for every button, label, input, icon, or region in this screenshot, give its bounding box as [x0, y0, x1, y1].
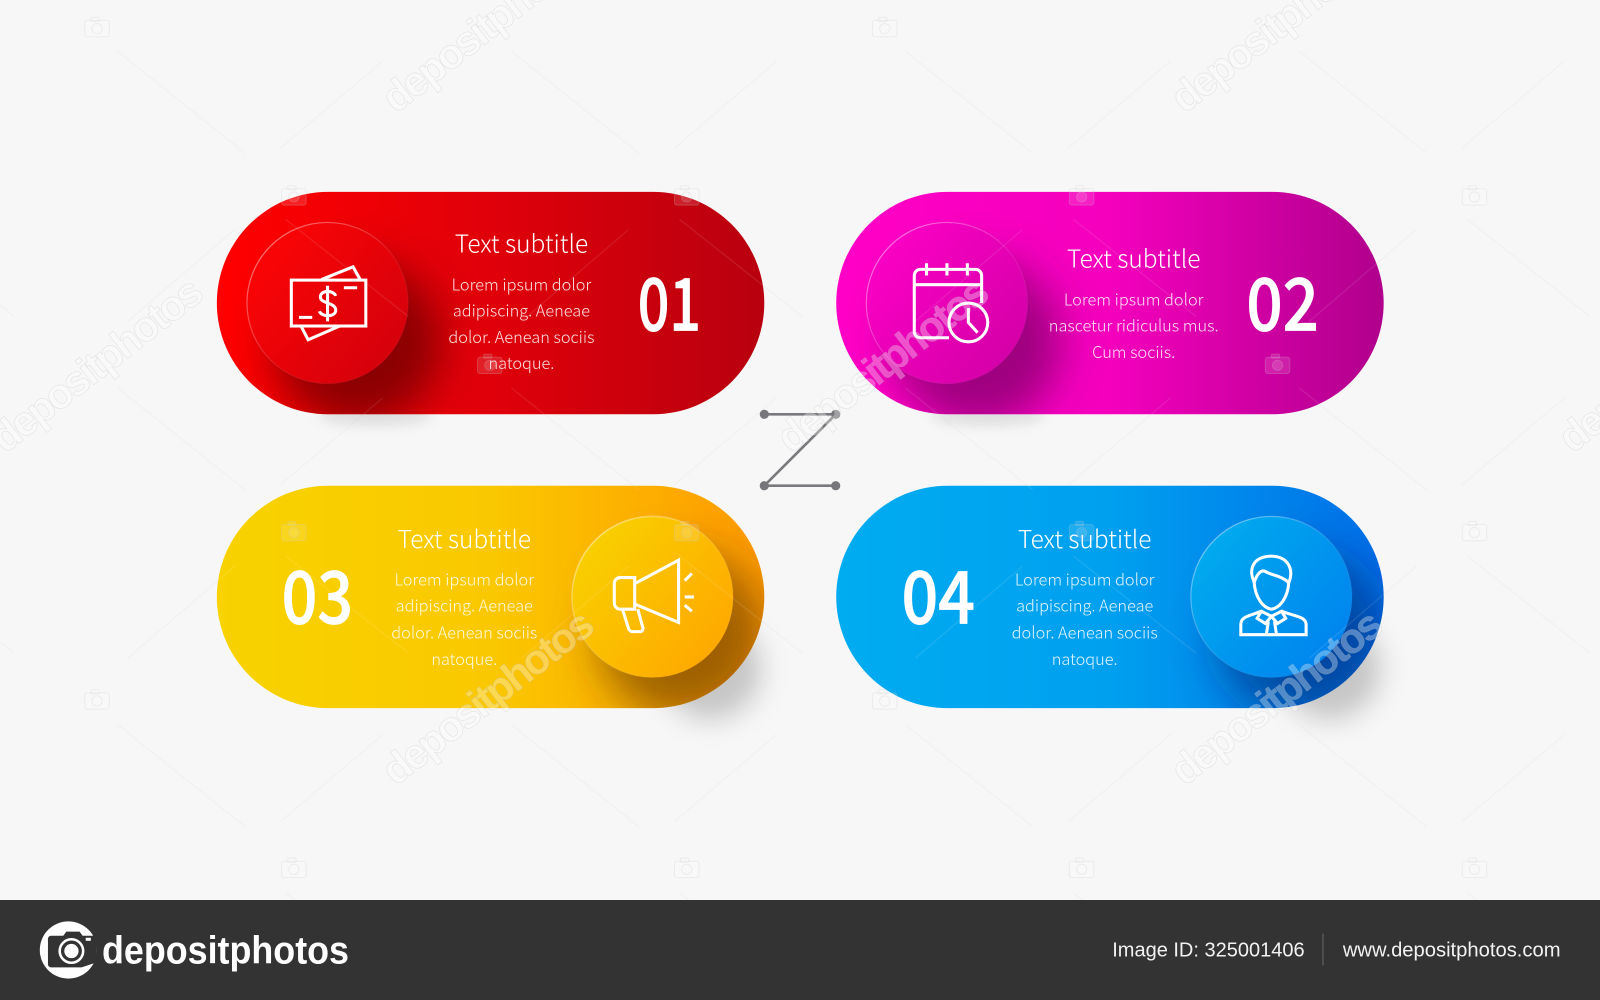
watermark: diagonal texts: depositphotos [767, 267, 997, 461]
footer bar [0, 900, 1600, 1000]
panel: step 02 magenta [836, 192, 1384, 427]
body text [391, 567, 537, 670]
icon disc [247, 222, 408, 384]
body text: dolor. Aenean sociis [1012, 619, 1158, 643]
icon: businessman [1241, 556, 1306, 635]
website: www.depositphotos.com [1342, 940, 1561, 962]
body text: nascetur ridiculus mus. [1049, 313, 1219, 337]
panel: step 03 yellow [217, 486, 765, 718]
icon disc [572, 516, 733, 678]
body text: natoque. [1052, 646, 1118, 670]
logo: camera badge [40, 921, 97, 979]
watermark: diagonal texts: depositphotos [1161, 600, 1391, 794]
body text: Cum sociis. [1092, 339, 1175, 363]
body text [1049, 287, 1219, 363]
number 04: 04 [902, 539, 975, 644]
soft shadow below panel 02 [931, 405, 1045, 426]
soft shadow below panel 01 [318, 405, 433, 426]
icon: banknotes [291, 267, 366, 340]
soft shadow beside panel 03 [659, 617, 761, 719]
panel: step 04 blue [836, 486, 1385, 718]
body text: Lorem ipsum dolor [1064, 287, 1204, 311]
body text [1012, 567, 1158, 670]
body text: adipiscing. Aeneae [396, 593, 533, 617]
body text: dolor. Aenean sociis [448, 324, 594, 348]
soft shadow beside panel 04 [1279, 617, 1381, 719]
watermark: small camera marks [85, 17, 1487, 878]
title: Text subtitle [398, 521, 531, 556]
title: Text subtitle [1018, 521, 1151, 556]
image id: Image ID: 325001406 [1112, 940, 1305, 962]
panel: step 01 red [217, 192, 764, 427]
body text: Lorem ipsum dolor [1015, 567, 1155, 591]
body text: natoque. [488, 350, 554, 374]
number 02: 02 [1246, 247, 1319, 352]
number 01: 01 [638, 247, 701, 352]
body text: adipiscing. Aeneae [1016, 593, 1154, 617]
body text [448, 271, 594, 374]
body text: natoque. [431, 646, 497, 670]
watermark: diagonal texts [0, 0, 1600, 794]
body text: dolor. Aenean sociis [391, 619, 537, 643]
connector: Z path between steps [760, 410, 840, 490]
body text: Lorem ipsum dolor [452, 271, 591, 295]
title: Text subtitle [455, 226, 588, 261]
icon: calendar with clock [914, 263, 988, 342]
body text: Lorem ipsum dolor [394, 567, 534, 591]
title: Text subtitle [1067, 240, 1200, 275]
number 03: 03 [282, 539, 353, 644]
body text: adipiscing. Aeneae [453, 297, 590, 321]
icon disc [1191, 516, 1352, 678]
icon: megaphone [614, 560, 694, 632]
watermark: diagonal texts: depositphotos [373, 600, 602, 794]
icon disc [866, 222, 1028, 384]
logo: wordmark: depositphotos [102, 929, 349, 972]
